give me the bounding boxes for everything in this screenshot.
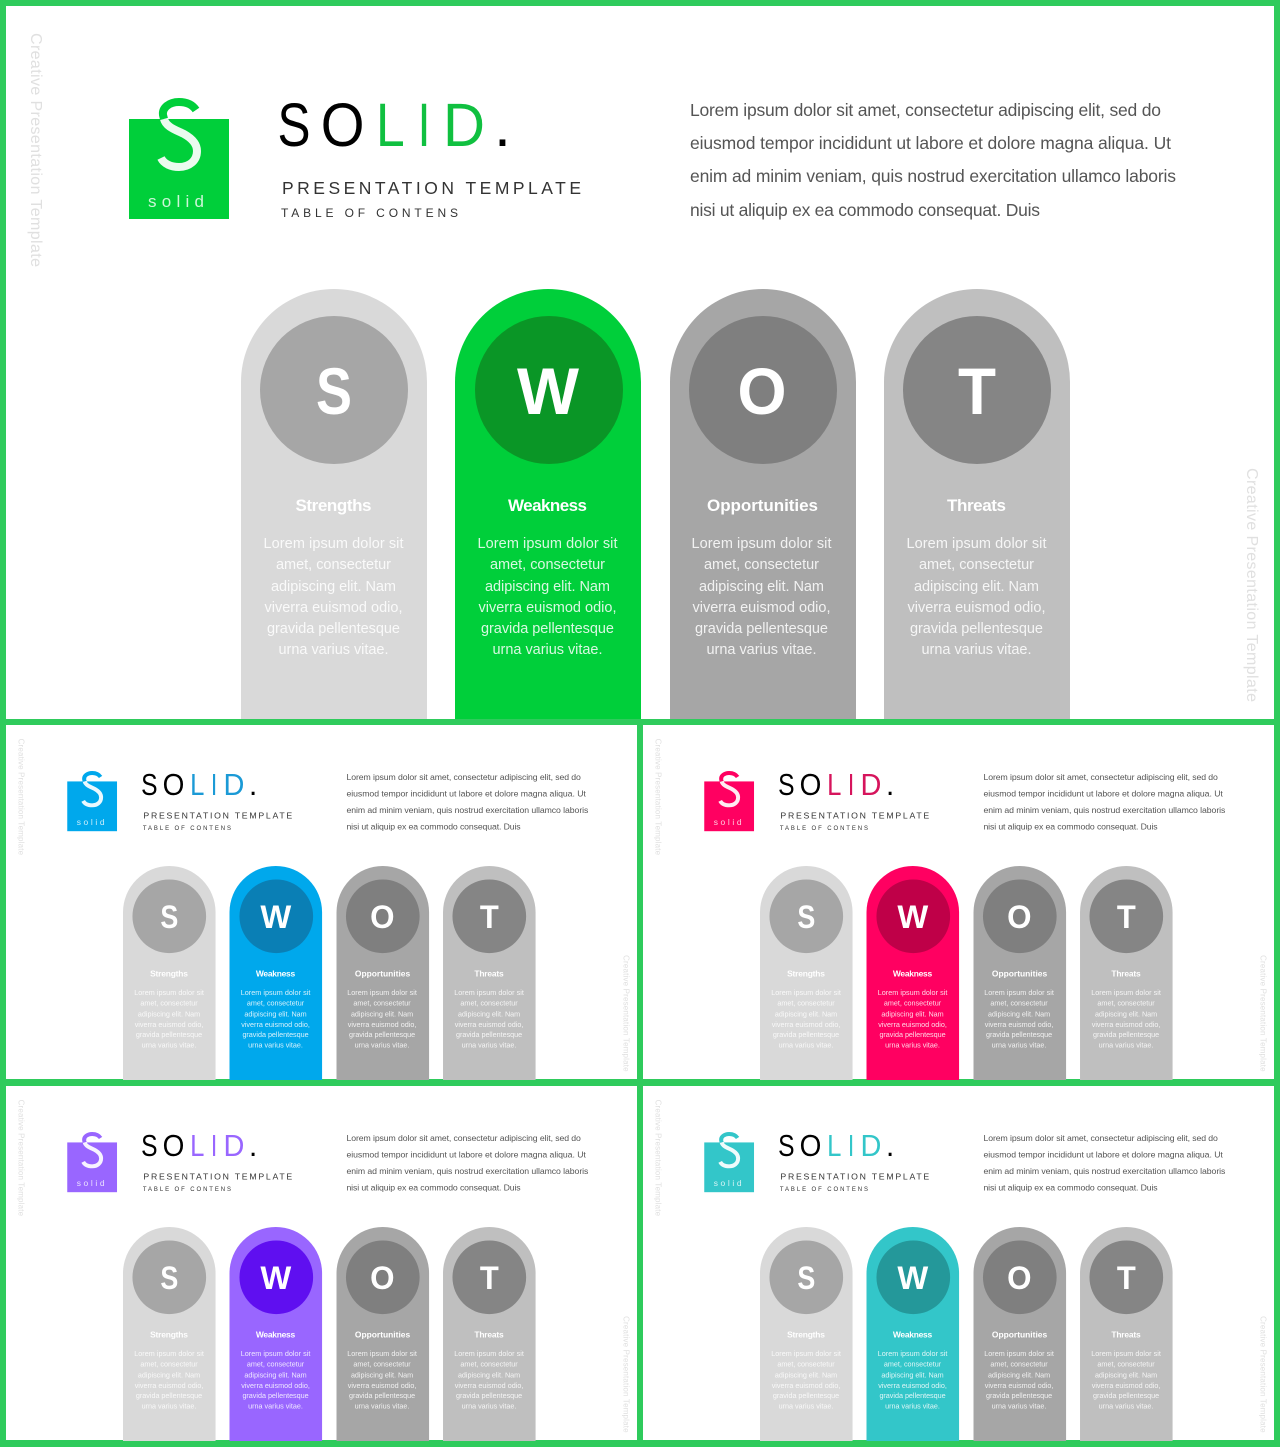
card: Strengths: amet, consectetur xyxy=(140,1359,198,1368)
card: Threats: viverra euismod odio, xyxy=(455,1020,523,1029)
card: Weakness: adipiscing elit. Nam xyxy=(881,1009,944,1018)
card: Strengths: gravida pellentesque xyxy=(267,621,400,637)
intro text: enim ad minim veniam, quis nostrud exercitation ullamco laboris xyxy=(983,1166,1226,1176)
card: Opportunities: viverra euismod odio, xyxy=(985,1020,1053,1029)
card: Strengths: adipiscing elit. Nam xyxy=(271,579,396,595)
card: Strengths: gravida pellentesque xyxy=(136,1391,202,1400)
card: Threats: Lorem ipsum dolor sit xyxy=(906,536,1046,552)
card: Opportunities xyxy=(974,866,1066,1080)
card: Weakness: W xyxy=(897,1259,928,1296)
panel: purple slide xyxy=(6,1086,637,1441)
card: Opportunities: O xyxy=(370,898,394,935)
caption: TABLE OF CONTENS xyxy=(281,206,458,220)
card: Strengths xyxy=(760,1227,853,1441)
intro text: enim ad minim veniam, quis nostrud exercitation ullamco laboris xyxy=(346,1166,589,1176)
icon: logo xyxy=(67,1134,117,1192)
title: L xyxy=(190,1130,204,1163)
card: Threats xyxy=(443,1227,536,1441)
card: Strengths: viverra euismod odio, xyxy=(772,1020,840,1029)
card: Opportunities: viverra euismod odio, xyxy=(348,1020,416,1029)
card: Strengths: amet, consectetur xyxy=(140,998,198,1007)
card: Opportunities: amet, consectetur xyxy=(353,998,411,1007)
card: Threats: amet, consectetur xyxy=(1097,1359,1155,1368)
card: Weakness: amet, consectetur xyxy=(247,998,305,1007)
intro text: eiusmod tempor incididunt ut labore et dolore magna aliqua. Ut xyxy=(983,1149,1223,1159)
card: Weakness: Weakness xyxy=(893,969,932,979)
side label right: Creative Presentation Template xyxy=(1259,1316,1268,1433)
subtitle: PRESENTATION TEMPLATE xyxy=(780,1172,929,1182)
card: Threats: T xyxy=(480,1259,499,1296)
card: Weakness: urna varius vitae. xyxy=(885,1402,940,1411)
card: Opportunities: adipiscing elit. Nam xyxy=(988,1370,1050,1379)
title: I xyxy=(848,769,854,802)
card: Threats: Threats xyxy=(1111,969,1141,979)
card: Threats: adipiscing elit. Nam xyxy=(458,1370,520,1379)
title: O xyxy=(800,769,821,802)
card: Threats: adipiscing elit. Nam xyxy=(1095,1009,1157,1018)
icon: logo: solid xyxy=(714,817,742,827)
intro text: eiusmod tempor incididunt ut labore et dolore magna aliqua. Ut xyxy=(346,1149,586,1159)
card: Opportunities: gravida pellentesque xyxy=(986,1391,1052,1400)
card: Opportunities: urna varius vitae. xyxy=(355,1041,409,1050)
card: Strengths: viverra euismod odio, xyxy=(264,600,402,616)
card: Weakness: adipiscing elit. Nam xyxy=(244,1370,307,1379)
card: Threats: viverra euismod odio, xyxy=(455,1381,523,1390)
card: Weakness: gravida pellentesque xyxy=(242,1391,309,1400)
title: I xyxy=(211,1130,217,1163)
title: L xyxy=(376,91,405,159)
title: S xyxy=(141,769,158,802)
side label right: Creative Presentation Template xyxy=(622,955,631,1072)
card: Threats: viverra euismod odio, xyxy=(908,600,1046,616)
card: Strengths: Lorem ipsum dolor sit xyxy=(134,1349,204,1358)
panel: blue slide xyxy=(6,725,637,1080)
card: Opportunities: Lorem ipsum dolor sit xyxy=(984,1349,1054,1358)
card: Strengths: Lorem ipsum dolor sit xyxy=(771,988,841,997)
title xyxy=(141,769,257,802)
card: Threats: Threats xyxy=(474,969,504,979)
caption: TABLE OF CONTENS xyxy=(143,826,231,832)
title: D xyxy=(443,91,485,159)
card: Opportunities: urna varius vitae. xyxy=(992,1041,1046,1050)
intro text: nisi ut aliquip ex ea commodo consequat. Duis xyxy=(346,822,521,832)
title: . xyxy=(249,1130,257,1163)
title: . xyxy=(249,769,257,802)
side label left: Creative Presentation Template xyxy=(16,739,25,856)
card: Opportunities: O xyxy=(1007,1259,1031,1296)
card: Threats: T xyxy=(480,898,499,935)
title: O xyxy=(321,91,364,159)
card: Strengths: gravida pellentesque xyxy=(136,1030,202,1039)
card: Weakness: gravida pellentesque xyxy=(879,1030,946,1039)
title: I xyxy=(848,1130,854,1163)
card: Threats: viverra euismod odio, xyxy=(1092,1020,1160,1029)
card: Threats xyxy=(1080,1227,1173,1441)
intro text: nisi ut aliquip ex ea commodo consequat. Duis xyxy=(346,1183,521,1193)
panel: pink slide xyxy=(643,725,1274,1080)
card: Opportunities: adipiscing elit. Nam xyxy=(351,1370,413,1379)
card: Threats: adipiscing elit. Nam xyxy=(914,579,1039,595)
card: Threats: gravida pellentesque xyxy=(910,621,1043,637)
card: Strengths: Lorem ipsum dolor sit xyxy=(771,1349,841,1358)
title: L xyxy=(827,769,841,802)
card: Strengths: Strengths xyxy=(296,496,372,515)
card: Strengths: viverra euismod odio, xyxy=(772,1381,840,1390)
card: Strengths: viverra euismod odio, xyxy=(135,1381,203,1390)
card: Strengths xyxy=(760,866,853,1080)
card: Threats: adipiscing elit. Nam xyxy=(458,1009,520,1018)
panel: teal slide xyxy=(643,1086,1274,1441)
intro text: Lorem ipsum dolor sit amet, consectetur adipiscing elit, sed do xyxy=(346,1133,581,1143)
card: Opportunities xyxy=(337,1227,429,1441)
card: Strengths: amet, consectetur xyxy=(276,557,391,573)
card: Opportunities: adipiscing elit. Nam xyxy=(988,1009,1050,1018)
card: Opportunities: Opportunities xyxy=(707,496,818,515)
card: Opportunities: amet, consectetur xyxy=(990,998,1048,1007)
card: Opportunities: Lorem ipsum dolor sit xyxy=(347,988,417,997)
card: Weakness xyxy=(455,289,641,719)
card: Weakness: Weakness xyxy=(256,969,295,979)
card: Strengths: S xyxy=(160,898,178,935)
intro text: enim ad minim veniam, quis nostrud exercitation ullamco laboris xyxy=(690,166,1176,186)
title: S xyxy=(778,1130,795,1163)
card: Opportunities: Opportunities xyxy=(355,1330,410,1340)
card: Weakness: W xyxy=(897,898,928,935)
card: Strengths xyxy=(123,1227,216,1441)
card: Threats: urna varius vitae. xyxy=(462,1041,516,1050)
card: Opportunities: urna varius vitae. xyxy=(355,1402,409,1411)
title xyxy=(141,1130,257,1163)
card: Strengths: S xyxy=(797,1259,815,1296)
card: Weakness: viverra euismod odio, xyxy=(878,1381,947,1390)
side label left: Creative Presentation Template xyxy=(653,739,662,856)
intro text: nisi ut aliquip ex ea commodo consequat. Duis xyxy=(983,822,1158,832)
card: Threats xyxy=(443,866,536,1080)
card: Weakness: urna varius vitae. xyxy=(248,1402,303,1411)
subtitle: PRESENTATION TEMPLATE xyxy=(143,811,292,821)
card: Opportunities: viverra euismod odio, xyxy=(692,600,830,616)
card: Weakness: W xyxy=(260,898,291,935)
card: Opportunities: amet, consectetur xyxy=(353,1359,411,1368)
card: Threats: Lorem ipsum dolor sit xyxy=(1091,988,1161,997)
icon: logo xyxy=(704,1134,754,1192)
card: Strengths: amet, consectetur xyxy=(777,998,835,1007)
icon: logo xyxy=(704,773,754,831)
card: Weakness: viverra euismod odio, xyxy=(241,1020,310,1029)
intro text: Lorem ipsum dolor sit amet, consectetur adipiscing elit, sed do xyxy=(983,772,1218,782)
icon: logo: solid xyxy=(77,817,105,827)
intro text: enim ad minim veniam, quis nostrud exercitation ullamco laboris xyxy=(346,805,589,815)
icon: logo: solid xyxy=(714,1178,742,1188)
card: Threats: gravida pellentesque xyxy=(1093,1030,1159,1039)
card: Opportunities: O xyxy=(370,1259,394,1296)
card: Strengths: Lorem ipsum dolor sit xyxy=(134,988,204,997)
card: Threats: T xyxy=(1117,1259,1136,1296)
intro text: eiusmod tempor incididunt ut labore et dolore magna aliqua. Ut xyxy=(690,133,1171,153)
intro text xyxy=(983,772,1226,832)
card: Opportunities: urna varius vitae. xyxy=(706,642,816,658)
card: Strengths: urna varius vitae. xyxy=(142,1402,196,1411)
card: Strengths xyxy=(123,866,216,1080)
card: Weakness: viverra euismod odio, xyxy=(478,600,616,616)
card: Opportunities: Opportunities xyxy=(992,969,1047,979)
card: Opportunities xyxy=(670,289,856,719)
card: Strengths: urna varius vitae. xyxy=(142,1041,196,1050)
card: Weakness: Weakness xyxy=(893,1330,932,1340)
card: Threats: urna varius vitae. xyxy=(922,642,1032,658)
card: Threats: gravida pellentesque xyxy=(456,1391,522,1400)
card: Weakness: W xyxy=(260,1259,291,1296)
card: Opportunities: Lorem ipsum dolor sit xyxy=(984,988,1054,997)
card: Weakness: amet, consectetur xyxy=(490,557,605,573)
card: Weakness: urna varius vitae. xyxy=(885,1041,940,1050)
icon: logo xyxy=(129,102,229,219)
card: Weakness: adipiscing elit. Nam xyxy=(881,1370,944,1379)
card: Weakness: Lorem ipsum dolor sit xyxy=(878,988,947,997)
card: Threats: gravida pellentesque xyxy=(456,1030,522,1039)
card: Weakness: urna varius vitae. xyxy=(248,1041,303,1050)
card: Strengths: Lorem ipsum dolor sit xyxy=(264,536,404,552)
card: Weakness: Lorem ipsum dolor sit xyxy=(241,988,310,997)
icon: logo: solid xyxy=(148,192,204,211)
icon: logo: solid xyxy=(77,1178,105,1188)
card: Threats: urna varius vitae. xyxy=(462,1402,516,1411)
side label right: Creative Presentation Template xyxy=(622,1316,631,1433)
card: Weakness: urna varius vitae. xyxy=(492,642,602,658)
card: Weakness: gravida pellentesque xyxy=(481,621,614,637)
card: Threats: viverra euismod odio, xyxy=(1092,1381,1160,1390)
card: Opportunities xyxy=(974,1227,1066,1441)
title: O xyxy=(163,1130,184,1163)
card: Strengths: urna varius vitae. xyxy=(779,1402,833,1411)
intro text xyxy=(346,772,589,832)
card: Threats: Lorem ipsum dolor sit xyxy=(1091,1349,1161,1358)
intro text xyxy=(346,1133,589,1193)
intro text: enim ad minim veniam, quis nostrud exercitation ullamco laboris xyxy=(983,805,1226,815)
side label right: Creative Presentation Template xyxy=(1243,468,1260,702)
card: Weakness: viverra euismod odio, xyxy=(878,1020,947,1029)
card: Threats xyxy=(884,289,1070,719)
title: S xyxy=(141,1130,158,1163)
card: Weakness: Lorem ipsum dolor sit xyxy=(878,1349,947,1358)
subtitle: PRESENTATION TEMPLATE xyxy=(143,1172,292,1182)
title: L xyxy=(190,769,204,802)
card: Threats: Lorem ipsum dolor sit xyxy=(454,1349,524,1358)
side label left: Creative Presentation Template xyxy=(16,1100,25,1217)
intro text xyxy=(690,100,1176,220)
card: Strengths: adipiscing elit. Nam xyxy=(775,1009,837,1018)
card: Opportunities: gravida pellentesque xyxy=(986,1030,1052,1039)
card: Strengths: urna varius vitae. xyxy=(779,1041,833,1050)
title: S xyxy=(778,769,795,802)
card: Threats: Threats xyxy=(474,1330,504,1340)
card: Strengths xyxy=(241,289,427,719)
intro text: Lorem ipsum dolor sit amet, consectetur adipiscing elit, sed do xyxy=(346,772,581,782)
subtitle: PRESENTATION TEMPLATE xyxy=(780,811,929,821)
card: Threats: Threats xyxy=(1111,1330,1141,1340)
title: O xyxy=(163,769,184,802)
card: Weakness: Lorem ipsum dolor sit xyxy=(478,536,618,552)
subtitle: PRESENTATION TEMPLATE xyxy=(282,178,581,198)
card: Strengths: Strengths xyxy=(787,969,825,979)
card: Strengths: Strengths xyxy=(150,969,188,979)
card: Strengths: adipiscing elit. Nam xyxy=(138,1370,200,1379)
card: Opportunities: Lorem ipsum dolor sit xyxy=(347,1349,417,1358)
intro text: Lorem ipsum dolor sit amet, consectetur adipiscing elit, sed do xyxy=(983,1133,1218,1143)
card: Strengths: S xyxy=(316,354,352,428)
card: Opportunities: gravida pellentesque xyxy=(695,621,828,637)
card: Opportunities: adipiscing elit. Nam xyxy=(699,579,824,595)
card: Threats xyxy=(1080,866,1173,1080)
card: Weakness xyxy=(230,1227,322,1441)
side label right: Creative Presentation Template xyxy=(1259,955,1268,1072)
card: Opportunities: Opportunities xyxy=(992,1330,1047,1340)
card: Weakness: Weakness xyxy=(508,496,587,515)
title: D xyxy=(224,1130,244,1163)
card: Strengths: S xyxy=(797,898,815,935)
title: S xyxy=(278,91,310,159)
card: Strengths: adipiscing elit. Nam xyxy=(775,1370,837,1379)
card: Opportunities: viverra euismod odio, xyxy=(348,1381,416,1390)
card: Opportunities: O xyxy=(738,354,786,428)
card: Strengths: Strengths xyxy=(150,1330,188,1340)
card: Threats: T xyxy=(1117,898,1136,935)
panel: main slide green xyxy=(6,6,1274,719)
intro text: nisi ut aliquip ex ea commodo consequat. Duis xyxy=(690,200,1040,220)
card: Weakness: Weakness xyxy=(256,1330,295,1340)
card: Strengths: S xyxy=(160,1259,178,1296)
title: I xyxy=(418,91,430,159)
title xyxy=(778,769,894,802)
card: Weakness xyxy=(867,1227,959,1441)
title: O xyxy=(800,1130,821,1163)
card: Weakness: adipiscing elit. Nam xyxy=(244,1009,307,1018)
card: Strengths: gravida pellentesque xyxy=(773,1391,839,1400)
card: Threats: amet, consectetur xyxy=(460,998,518,1007)
card: Weakness: W xyxy=(517,354,580,428)
title: D xyxy=(861,1130,881,1163)
card: Strengths: Strengths xyxy=(787,1330,825,1340)
caption: TABLE OF CONTENS xyxy=(780,826,868,832)
card: Threats: amet, consectetur xyxy=(919,557,1034,573)
card: Opportunities: gravida pellentesque xyxy=(349,1391,415,1400)
card: Threats: amet, consectetur xyxy=(460,1359,518,1368)
card: Opportunities: amet, consectetur xyxy=(990,1359,1048,1368)
intro text xyxy=(983,1133,1226,1193)
card: Weakness xyxy=(230,866,322,1080)
card: Opportunities: adipiscing elit. Nam xyxy=(351,1009,413,1018)
card: Weakness: Lorem ipsum dolor sit xyxy=(241,1349,310,1358)
card: Opportunities: urna varius vitae. xyxy=(992,1402,1046,1411)
card: Weakness: amet, consectetur xyxy=(884,998,942,1007)
card: Strengths: amet, consectetur xyxy=(777,1359,835,1368)
card: Strengths: viverra euismod odio, xyxy=(135,1020,203,1029)
intro text: eiusmod tempor incididunt ut labore et dolore magna aliqua. Ut xyxy=(346,788,586,798)
card: Strengths: gravida pellentesque xyxy=(773,1030,839,1039)
card: Threats: adipiscing elit. Nam xyxy=(1095,1370,1157,1379)
side label left: Creative Presentation Template xyxy=(27,33,44,267)
card: Weakness: amet, consectetur xyxy=(247,1359,305,1368)
card: Weakness: viverra euismod odio, xyxy=(241,1381,310,1390)
caption: TABLE OF CONTENS xyxy=(143,1187,231,1193)
card: Opportunities: O xyxy=(1007,898,1031,935)
card: Threats: urna varius vitae. xyxy=(1099,1041,1153,1050)
card: Threats: amet, consectetur xyxy=(1097,998,1155,1007)
card: Opportunities: amet, consectetur xyxy=(704,557,819,573)
card: Opportunities: gravida pellentesque xyxy=(349,1030,415,1039)
caption: TABLE OF CONTENS xyxy=(780,1187,868,1193)
card: Strengths: urna varius vitae. xyxy=(278,642,388,658)
icon: logo xyxy=(67,773,117,831)
card: Threats: T xyxy=(958,354,996,428)
card: Opportunities: Opportunities xyxy=(355,969,410,979)
title: D xyxy=(224,769,244,802)
card: Threats: gravida pellentesque xyxy=(1093,1391,1159,1400)
card: Opportunities: viverra euismod odio, xyxy=(985,1381,1053,1390)
title xyxy=(278,91,511,159)
card: Weakness: adipiscing elit. Nam xyxy=(485,579,610,595)
title xyxy=(778,1130,894,1163)
card: Weakness: gravida pellentesque xyxy=(242,1030,309,1039)
title: I xyxy=(211,769,217,802)
intro text: eiusmod tempor incididunt ut labore et dolore magna aliqua. Ut xyxy=(983,788,1223,798)
card: Opportunities xyxy=(337,866,429,1080)
side label left: Creative Presentation Template xyxy=(653,1100,662,1217)
card: Strengths: adipiscing elit. Nam xyxy=(138,1009,200,1018)
title: L xyxy=(827,1130,841,1163)
card: Weakness: amet, consectetur xyxy=(884,1359,942,1368)
title: . xyxy=(886,1130,894,1163)
card: Weakness xyxy=(867,866,959,1080)
card: Threats: Threats xyxy=(947,496,1006,515)
title: . xyxy=(494,91,511,159)
title: . xyxy=(886,769,894,802)
intro text: Lorem ipsum dolor sit amet, consectetur adipiscing elit, sed do xyxy=(690,100,1161,120)
card: Opportunities: Lorem ipsum dolor sit xyxy=(692,536,832,552)
intro text: nisi ut aliquip ex ea commodo consequat. Duis xyxy=(983,1183,1158,1193)
card: Threats: urna varius vitae. xyxy=(1099,1402,1153,1411)
card: Weakness: gravida pellentesque xyxy=(879,1391,946,1400)
title: D xyxy=(861,769,881,802)
card: Threats: Lorem ipsum dolor sit xyxy=(454,988,524,997)
